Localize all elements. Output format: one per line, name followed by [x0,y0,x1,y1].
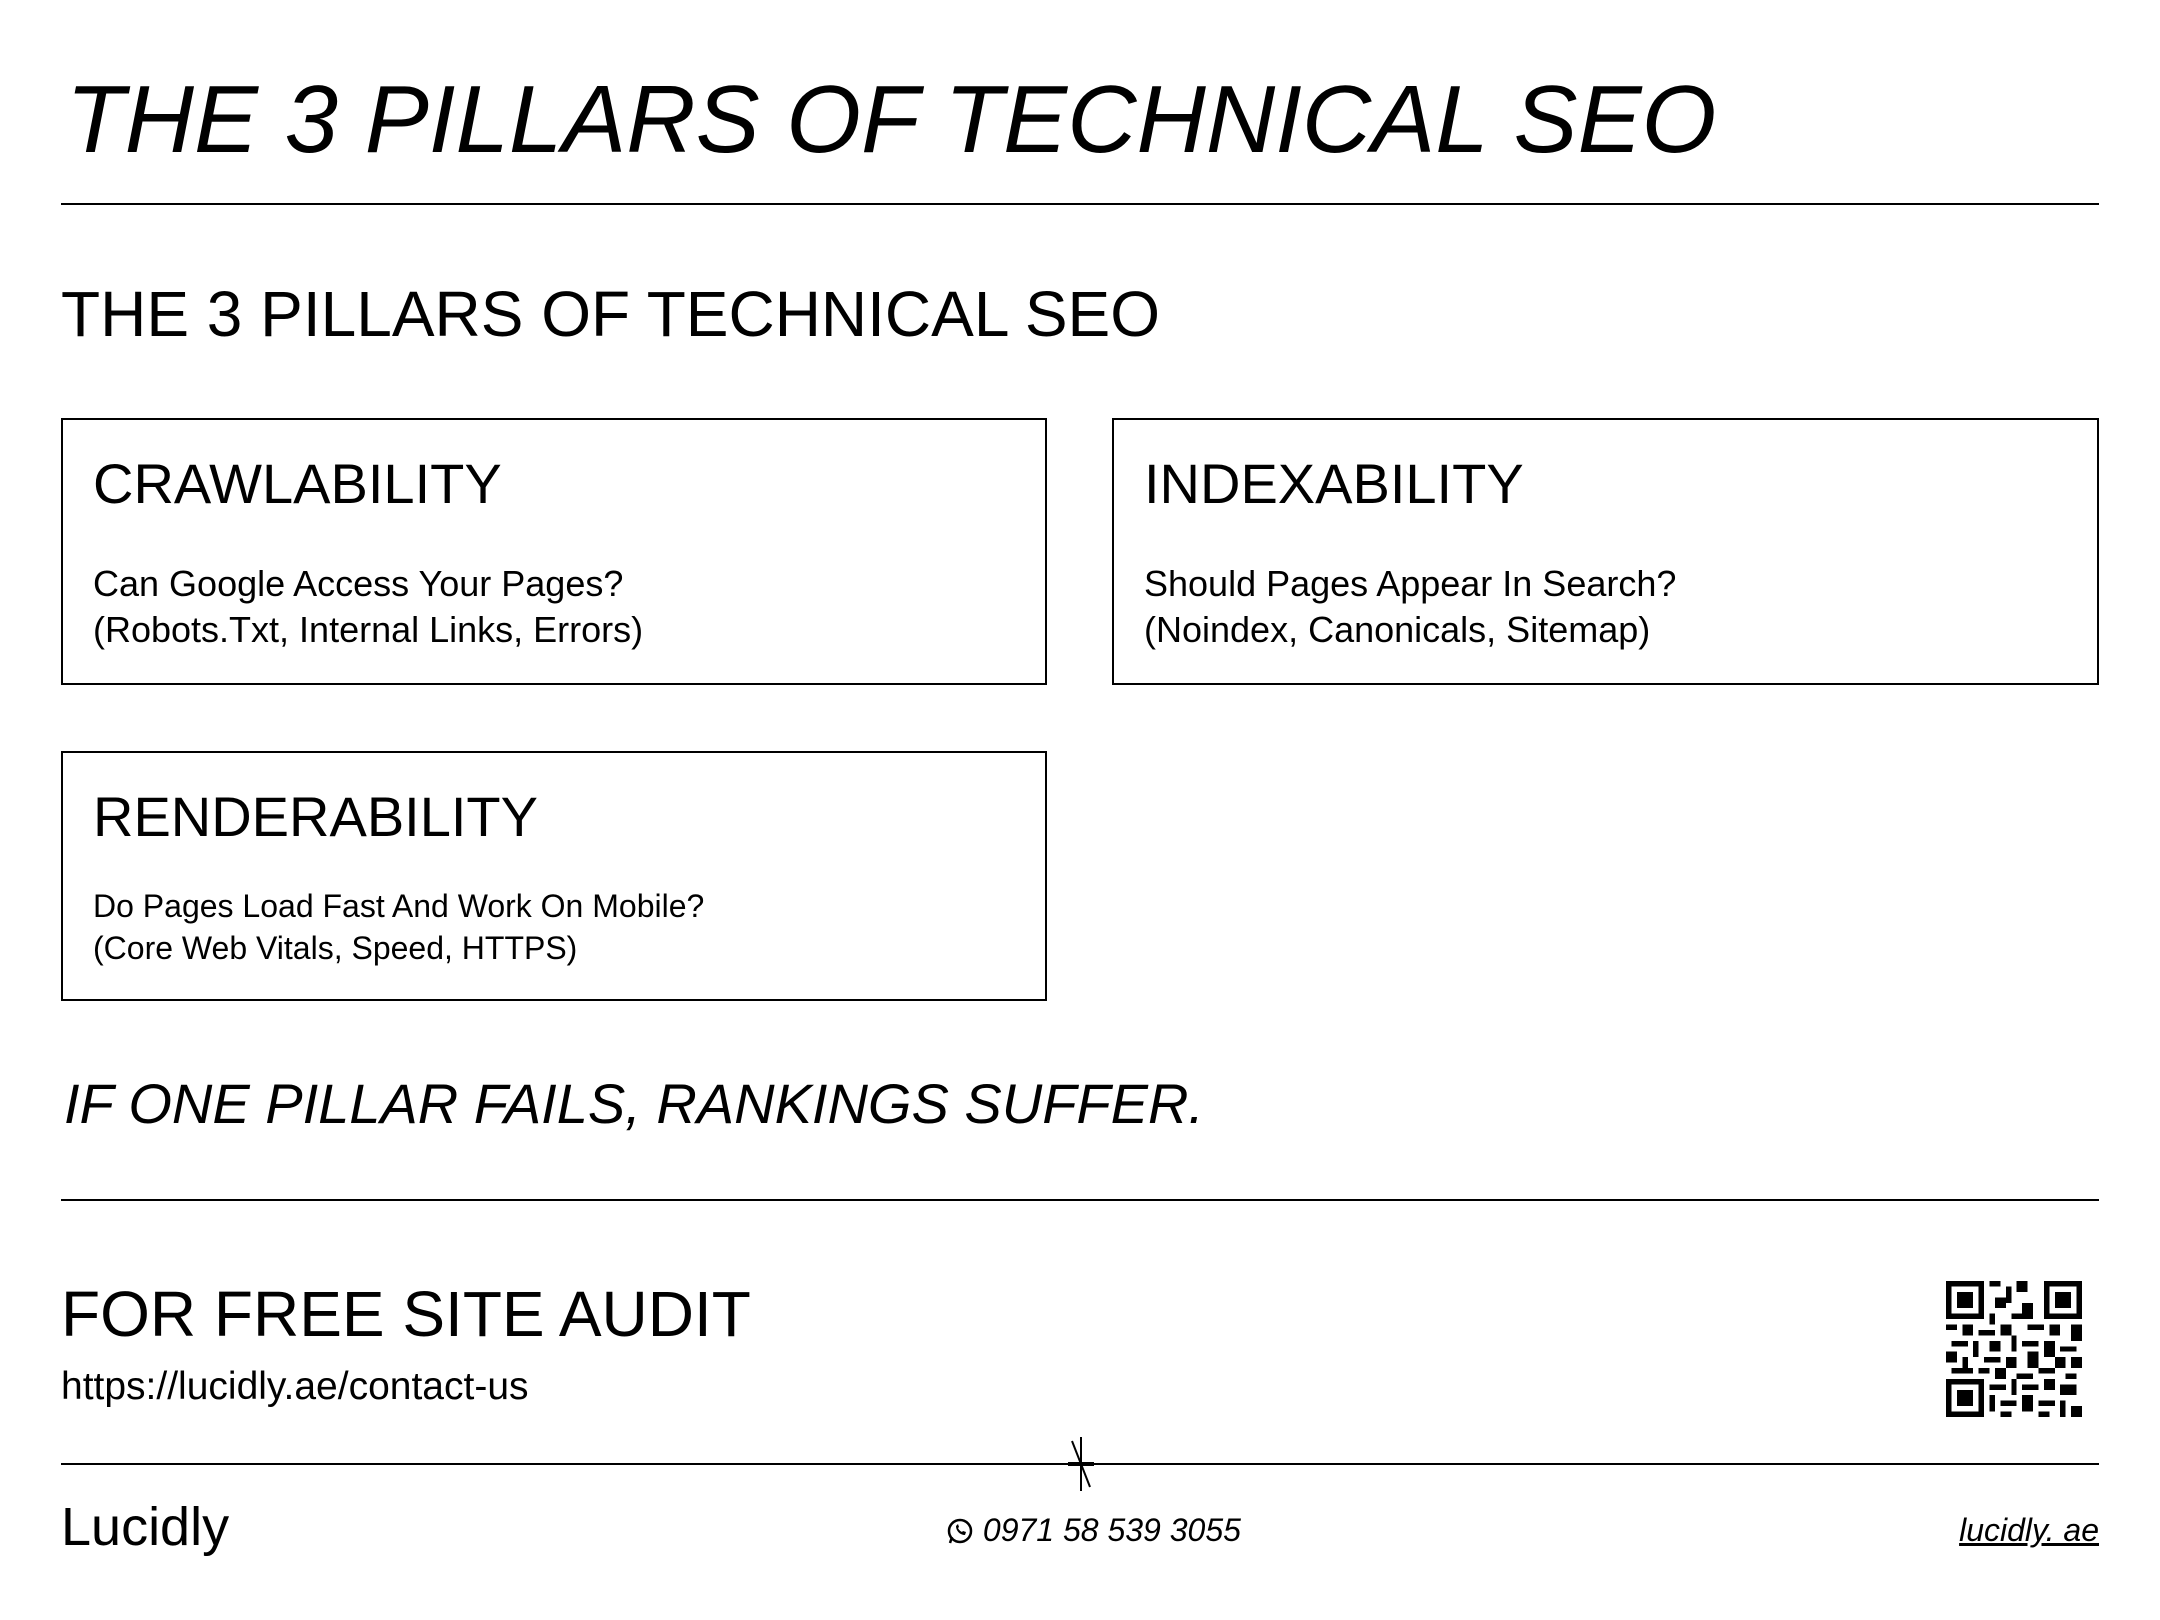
text: renderability body [93,888,704,966]
text: renderability body: Do Pages Load Fast And Work On Mobile? [93,888,704,924]
heading: renderability: RENDERABILITY [93,785,538,848]
text: indexability body: Should Pages Appear In Search? [1144,563,1676,604]
text: crawlability body: Can Google Access Your Pages? [93,563,623,604]
heading: indexability: INDEXABILITY [1144,452,1524,515]
cta url: https://lucidly.ae/contact-us [61,1365,529,1408]
text: indexability body [1144,563,1676,650]
link: website: lucidly. ae [1959,1512,2099,1548]
title: THE 3 PILLARS OF TECHNICAL SEO [66,66,1716,173]
text: crawlability body: (Robots.Txt, Internal Links, Errors) [93,609,643,650]
heading: crawlability: CRAWLABILITY [93,452,502,515]
panel: crawlability [61,418,1047,685]
panel: indexability [1112,418,2099,685]
icon: qr code [1946,1281,2082,1417]
text: renderability body: (Core Web Vitals, Speed, HTTPS) [93,930,577,966]
icon: star mark [1068,1437,1094,1491]
logo: lucidly: Lucidly [61,1497,229,1557]
tagline: IF ONE PILLAR FAILS, RANKINGS SUFFER. [64,1072,1204,1135]
contact: phone: 0971 58 539 3055 [983,1512,1241,1548]
subtitle: THE 3 PILLARS OF TECHNICAL SEO [61,278,1160,350]
panel: renderability [61,751,1047,1001]
text: crawlability body [93,563,643,650]
text: indexability body: (Noindex, Canonicals, Sitemap) [1144,609,1650,650]
cta heading: FOR FREE SITE AUDIT [61,1278,751,1350]
